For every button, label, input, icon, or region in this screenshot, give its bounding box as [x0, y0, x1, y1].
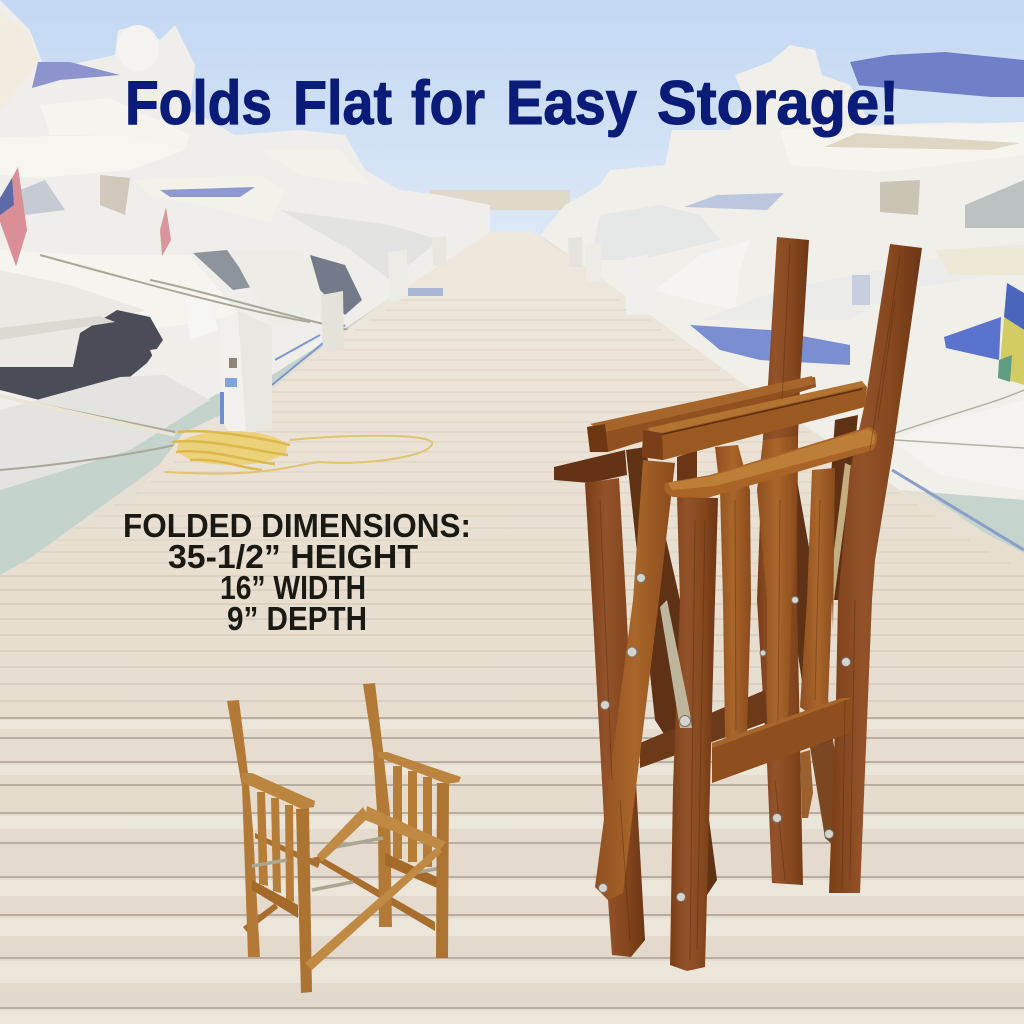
- back cross rails: [243, 833, 435, 932]
- title: Flat: [293, 69, 392, 138]
- icon: large folded chair: [554, 237, 922, 971]
- icon: dock pedestals: [220, 236, 649, 436]
- background: far wall: [430, 190, 570, 210]
- middle armrest: [642, 381, 867, 460]
- front left leg: [585, 478, 645, 957]
- metal brace: [660, 600, 692, 728]
- metal braces: [252, 838, 447, 890]
- wood grain: [600, 245, 900, 960]
- left armrest: [554, 450, 627, 483]
- text block: folded dimensions: FOLDED DIMENSIONS:: [123, 507, 471, 544]
- right diagonal piece: [810, 740, 848, 845]
- slats: [715, 436, 835, 742]
- panel: boats right: [540, 45, 1024, 550]
- icon: rope coil: [0, 396, 432, 474]
- text block: folded dimensions: 35-1/2” HEIGHT: [168, 538, 418, 575]
- text block: folded dimensions: 9” DEPTH: [227, 600, 367, 637]
- title: Storage!: [657, 69, 899, 138]
- background: water: [0, 225, 1024, 580]
- armrests: [242, 752, 461, 809]
- short spacer behind armrest: [677, 450, 697, 497]
- back posts: [227, 683, 392, 957]
- text block: folded dimensions: 16” WIDTH: [220, 569, 366, 606]
- rear armrest: [587, 376, 816, 452]
- title: for: [411, 69, 485, 138]
- front crossbar: [712, 698, 852, 783]
- title: Folds: [125, 69, 272, 138]
- panel: boats left: [0, 0, 490, 490]
- rear center post: [757, 237, 809, 885]
- front diagonal leg: [595, 460, 675, 900]
- icon: small open chair: [227, 683, 461, 993]
- front armrest: [664, 427, 877, 498]
- text block: folded dimensions: [123, 507, 471, 637]
- tan rear brace: [828, 463, 852, 600]
- panel: dock: [0, 232, 1024, 1024]
- slats: [257, 766, 432, 902]
- rear crossbar: [640, 690, 767, 768]
- title: Easy: [506, 69, 637, 138]
- small rear piece: [800, 750, 813, 818]
- side rails: [252, 853, 437, 918]
- rear right post: [829, 244, 922, 893]
- center front leg: [670, 497, 718, 971]
- title: [125, 69, 899, 138]
- rear dark cross legs: [626, 415, 858, 898]
- bolts: [598, 574, 850, 902]
- seat frame: [305, 806, 446, 970]
- background: sky: [0, 0, 1024, 240]
- front legs: [296, 783, 449, 993]
